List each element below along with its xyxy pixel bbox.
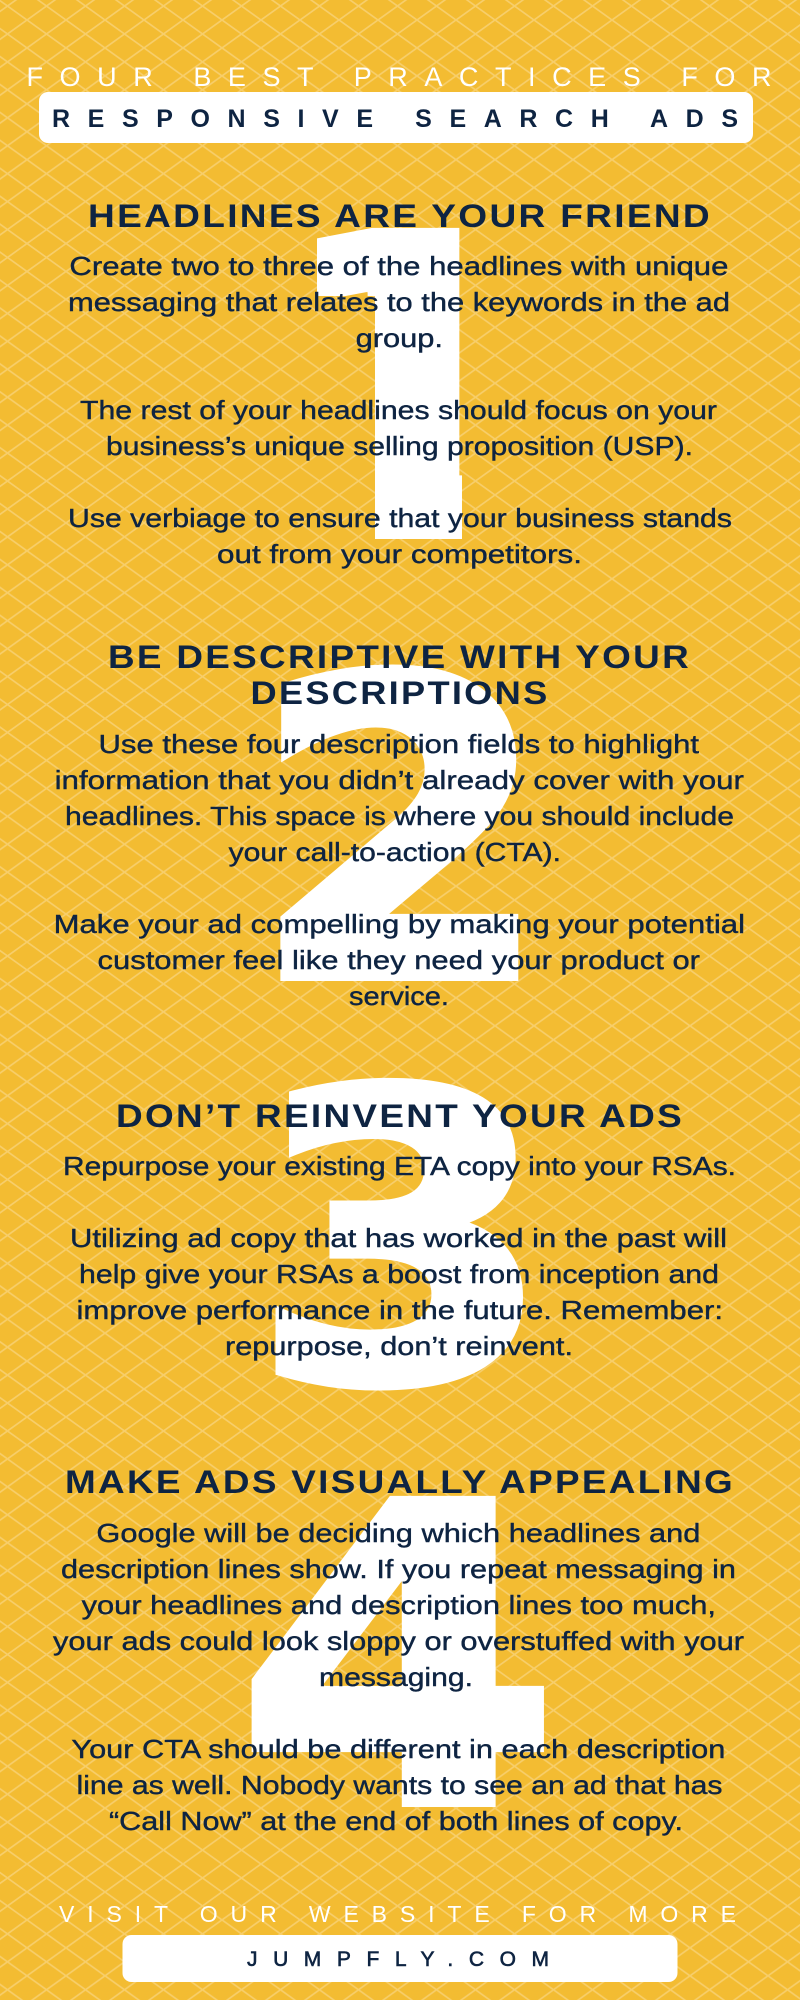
title xyxy=(26,62,772,143)
large numeral 3: 3 xyxy=(252,1010,552,1475)
body text 4: your headlines and description lines too much, xyxy=(82,1590,716,1620)
body text 1: messaging that relates to the keywords in the ad xyxy=(68,287,730,317)
title banner xyxy=(39,92,753,143)
body text 4: description lines show. If you repeat messaging in xyxy=(61,1554,736,1584)
body text 1 xyxy=(68,251,732,569)
body text 2 xyxy=(54,729,745,1011)
body text 4: Your CTA should be different in each description xyxy=(71,1734,725,1764)
body text 1: Create two to three of the headlines with unique xyxy=(69,251,728,281)
heading 3: DON’T REINVENT YOUR ADS xyxy=(116,1098,684,1134)
heading 1: HEADLINES ARE YOUR FRIEND xyxy=(88,198,712,234)
body text 2: headlines. This space is where you should include xyxy=(65,801,734,831)
heading 2: BE DESCRIPTIVE WITH YOUR xyxy=(108,639,691,675)
large numeral 1: 1 xyxy=(244,152,561,632)
body text 1: The rest of your headlines should focus on your xyxy=(80,395,717,425)
panel: practice 4 xyxy=(53,1419,744,1900)
body text 3: improve performance in the future. Remember: xyxy=(76,1295,723,1325)
body text 3: Repurpose your existing ETA copy into your RSAs. xyxy=(63,1151,736,1181)
body text 3: repurpose, don’t reinvent. xyxy=(225,1331,573,1361)
footer url button: JUMPFLY.COM xyxy=(247,1948,549,1971)
panel: practice 2 xyxy=(54,594,745,1074)
body text 4 xyxy=(53,1518,744,1836)
heading 4: MAKE ADS VISUALLY APPEALING xyxy=(65,1464,735,1500)
body text 4: messaging. xyxy=(319,1662,473,1692)
body text 1: group. xyxy=(356,323,443,353)
body text 2: Use these four description fields to highlight xyxy=(98,729,700,759)
body text 4: Google will be deciding which headlines and xyxy=(96,1518,700,1548)
body text 2: customer feel like they need your product or xyxy=(98,945,700,975)
body text 2: service. xyxy=(349,981,449,1011)
body text 1: Use verbiage to ensure that your business stands xyxy=(68,503,732,533)
body text 4: “Call Now” at the end of both lines of copy. xyxy=(109,1806,683,1836)
body text 2: Make your ad compelling by making your potential xyxy=(54,909,745,939)
body text 3 xyxy=(63,1151,736,1361)
footer line: visit our website: VISIT OUR WEBSITE FOR MORE xyxy=(59,1901,736,1927)
body text 2: your call-to-action (CTA). xyxy=(229,837,561,867)
panel: practice 3 xyxy=(63,1010,736,1475)
body text 2: information that you didn’t already cover with your xyxy=(55,765,744,795)
body text 3: Utilizing ad copy that has worked in the past will xyxy=(70,1223,727,1253)
heading 2: DESCRIPTIONS xyxy=(250,675,550,711)
title banner: RESPONSIVE SEARCH ADS xyxy=(52,105,738,133)
footer call to action xyxy=(59,1901,736,1982)
body text 1: out from your competitors. xyxy=(217,539,582,569)
title line: four best practices for: FOUR BEST PRACTICES FOR xyxy=(26,62,772,92)
footer url button xyxy=(122,1935,678,1982)
panel: practice 1 xyxy=(70,204,732,569)
body text 1: business’s unique selling proposition (USP). xyxy=(106,431,693,461)
large numeral 2: 2 xyxy=(252,594,550,1074)
heading 2 xyxy=(108,639,691,711)
body text 4: line as well. Nobody wants to see an ad that has xyxy=(76,1770,722,1800)
large numeral 4: 4 xyxy=(236,1419,560,1900)
body text 3: help give your RSAs a boost from inception and xyxy=(79,1259,719,1289)
body text 4: your ads could look sloppy or overstuffed with your xyxy=(53,1626,744,1656)
